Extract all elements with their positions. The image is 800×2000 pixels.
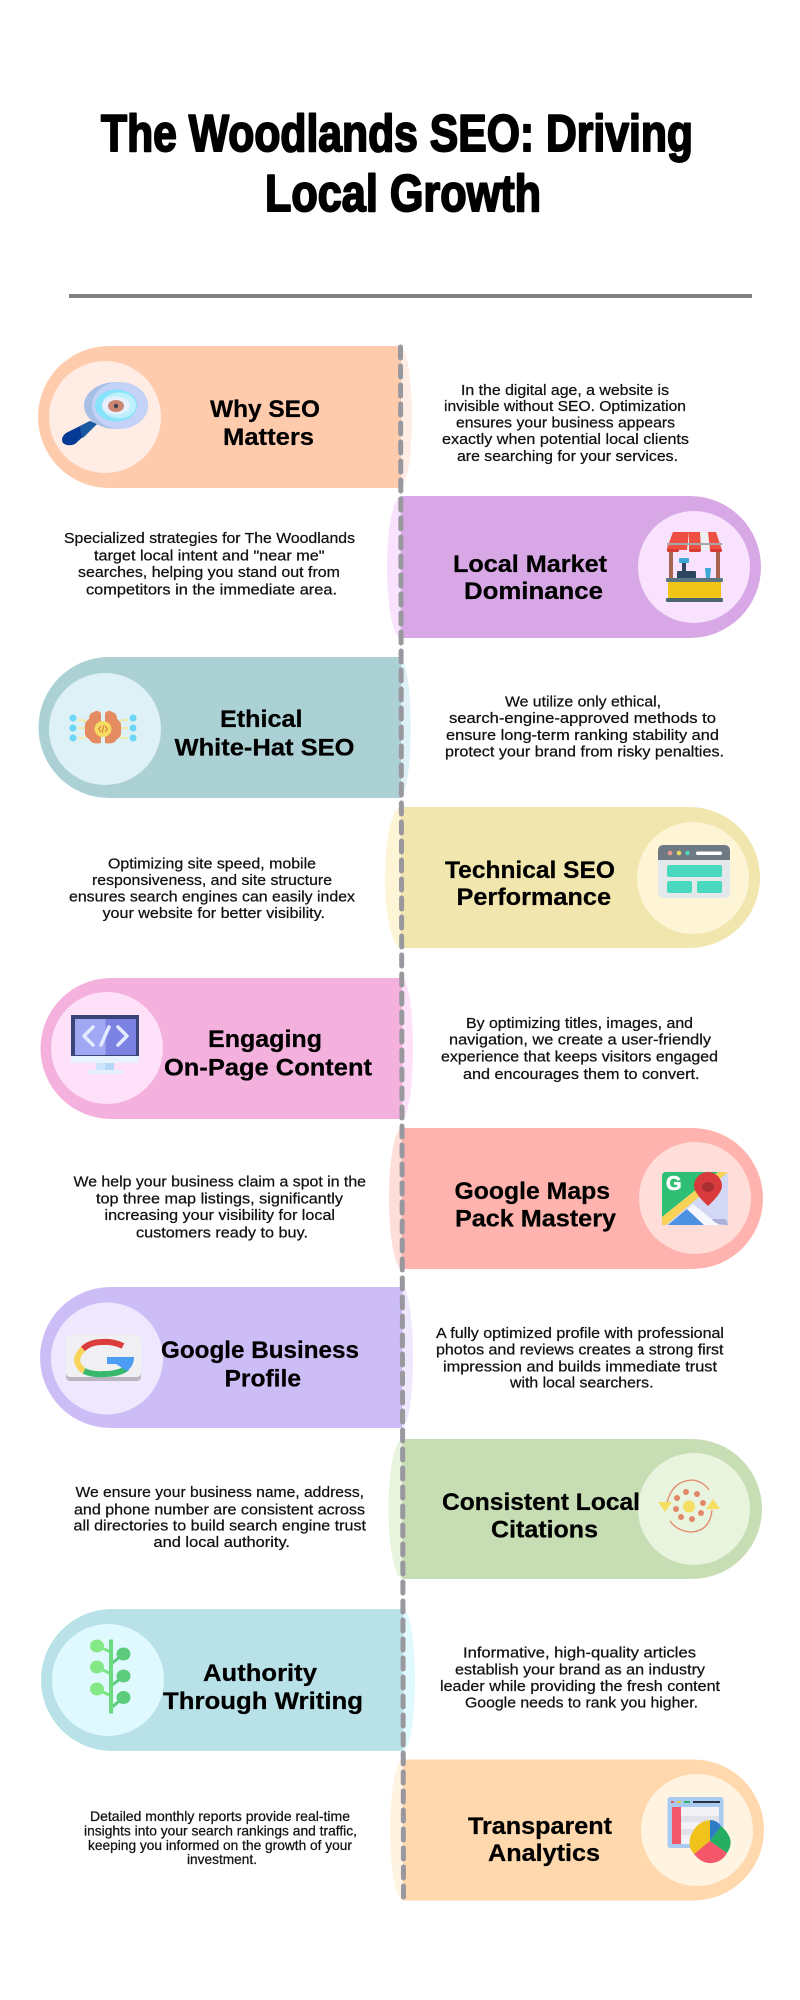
description: Informative, high-quality articles [463,1644,696,1662]
heading [210,396,320,451]
description: ensure long-term ranking stability and [446,727,719,744]
heading: Technical SEO [445,857,615,884]
pill [40,978,402,1119]
pill [40,1287,402,1428]
description: your website for better visibility. [102,905,325,922]
description: We ensure your business name, address, [76,1484,364,1501]
description: In the digital age, a website is [461,382,669,399]
description: and encourages them to convert. [463,1066,700,1083]
description: photos and reviews creates a strong first [436,1342,724,1358]
panel: google maps pack mastery [74,1128,763,1269]
heading: Authority [203,1660,318,1687]
panel: local market dominance [64,496,761,638]
title: Local Growth [265,165,541,223]
description: impression and builds immediate trust [443,1358,718,1376]
heading [453,551,607,605]
icon: code monitor [51,992,163,1104]
heading: Pack Mastery [455,1206,617,1232]
description: protect your brand from risky penalties. [445,744,724,760]
heading: On-Page Content [164,1054,372,1082]
description: competitors in the immediate area. [86,582,337,598]
heading: Engaging [208,1026,322,1053]
description: ensures search engines can easily index [69,888,356,906]
description [445,694,724,760]
description: exactly when potential local clients [442,431,689,448]
description [436,1325,724,1392]
heading: Consistent Local [442,1489,640,1516]
description: all directories to build search engine trust [74,1518,367,1534]
description: invisible without SEO. Optimization [444,398,686,415]
heading [164,1026,372,1082]
icon: browser window [637,822,749,934]
description [84,1808,357,1867]
heading [163,1660,363,1715]
description: responsiveness, and site structure [92,872,332,889]
description: investment. [187,1851,257,1867]
icon: analytics [641,1774,753,1886]
heading: Performance [456,884,611,911]
description [64,530,355,598]
description [69,856,356,922]
description: searches, helping you stand out from [78,564,340,581]
heading: Transparent [468,1813,612,1840]
description [442,382,689,465]
description: ensures your business appears [456,414,675,432]
pill [38,657,401,798]
icon: google maps: G [666,1173,682,1195]
description: establish your brand as an industry [455,1662,706,1678]
heading [442,1489,640,1544]
title [101,105,693,223]
icon: google maps [639,1142,751,1254]
heading: Matters [223,424,314,451]
description [441,1015,718,1083]
heading: Local Market [453,551,607,578]
heading: Google Business [161,1337,359,1364]
heading: Analytics [488,1840,600,1867]
description: experience that keeps visitors engaged [441,1048,718,1066]
heading [161,1337,359,1392]
icon: magnifying glass with eye [49,361,161,473]
heading: Profile [224,1366,301,1392]
icon: google card [51,1302,163,1414]
heading: Through Writing [163,1688,363,1715]
icon: citations cycle [638,1453,750,1565]
description: We utilize only ethical, [505,694,661,710]
description [440,1644,721,1712]
description: A fully optimized profile with professional [436,1325,724,1342]
description: Specialized strategies for The Woodlands [64,530,355,547]
description: search-engine-approved methods to [449,710,716,727]
panel: technical SEO performance [69,807,760,948]
description: By optimizing titles, images, and [466,1015,693,1032]
heading [468,1813,612,1867]
description: Google needs to rank you higher. [465,1694,698,1712]
panel: consistent local citations [74,1439,762,1579]
icon: brain with code [49,673,161,785]
icon: sprout [52,1624,164,1736]
pill [38,346,401,488]
description: leader while providing the fresh content [440,1678,721,1695]
heading: Why SEO [210,396,320,423]
heading [454,1178,617,1232]
panel: ethical white-hat SEO [38,657,724,798]
pill [41,1609,403,1751]
panel: google business profile [40,1287,724,1428]
description: top three map listings, significantly [96,1190,344,1208]
description: We help your business claim a spot in the [74,1174,366,1190]
description: increasing your visibility for local [104,1207,335,1224]
heading: Ethical [220,706,302,733]
description: navigation, we create a user-friendly [449,1032,712,1048]
panel: authority through writing [41,1609,721,1751]
pill [402,1128,763,1269]
description: keeping you informed on the growth of your [88,1837,352,1853]
description: with local searchers. [509,1374,654,1392]
description: target local intent and "near me" [94,548,324,564]
pill [402,1439,762,1579]
pill [401,807,760,948]
heading [445,857,615,911]
heading: White-Hat SEO [174,734,354,762]
description: are searching for your services. [457,448,678,465]
description: and phone number are consistent across [74,1502,365,1518]
description: insights into your search rankings and traffic, [84,1822,357,1838]
pill [401,496,761,638]
description: Optimizing site speed, mobile [108,856,316,872]
panel: transparent analytics [84,1760,764,1900]
description [74,1174,366,1242]
description: customers ready to buy. [136,1224,308,1242]
panel: why SEO matters [38,346,689,488]
description [74,1484,367,1551]
pill [403,1760,764,1900]
heading: Citations [491,1516,598,1544]
panel: engaging on-page content [40,978,718,1119]
heading [174,706,354,762]
description: and local authority. [154,1534,290,1551]
description: Detailed monthly reports provide real-time [90,1808,350,1824]
heading: Google Maps [454,1178,610,1205]
icon: market stall [638,511,750,623]
heading: Dominance [464,578,603,605]
